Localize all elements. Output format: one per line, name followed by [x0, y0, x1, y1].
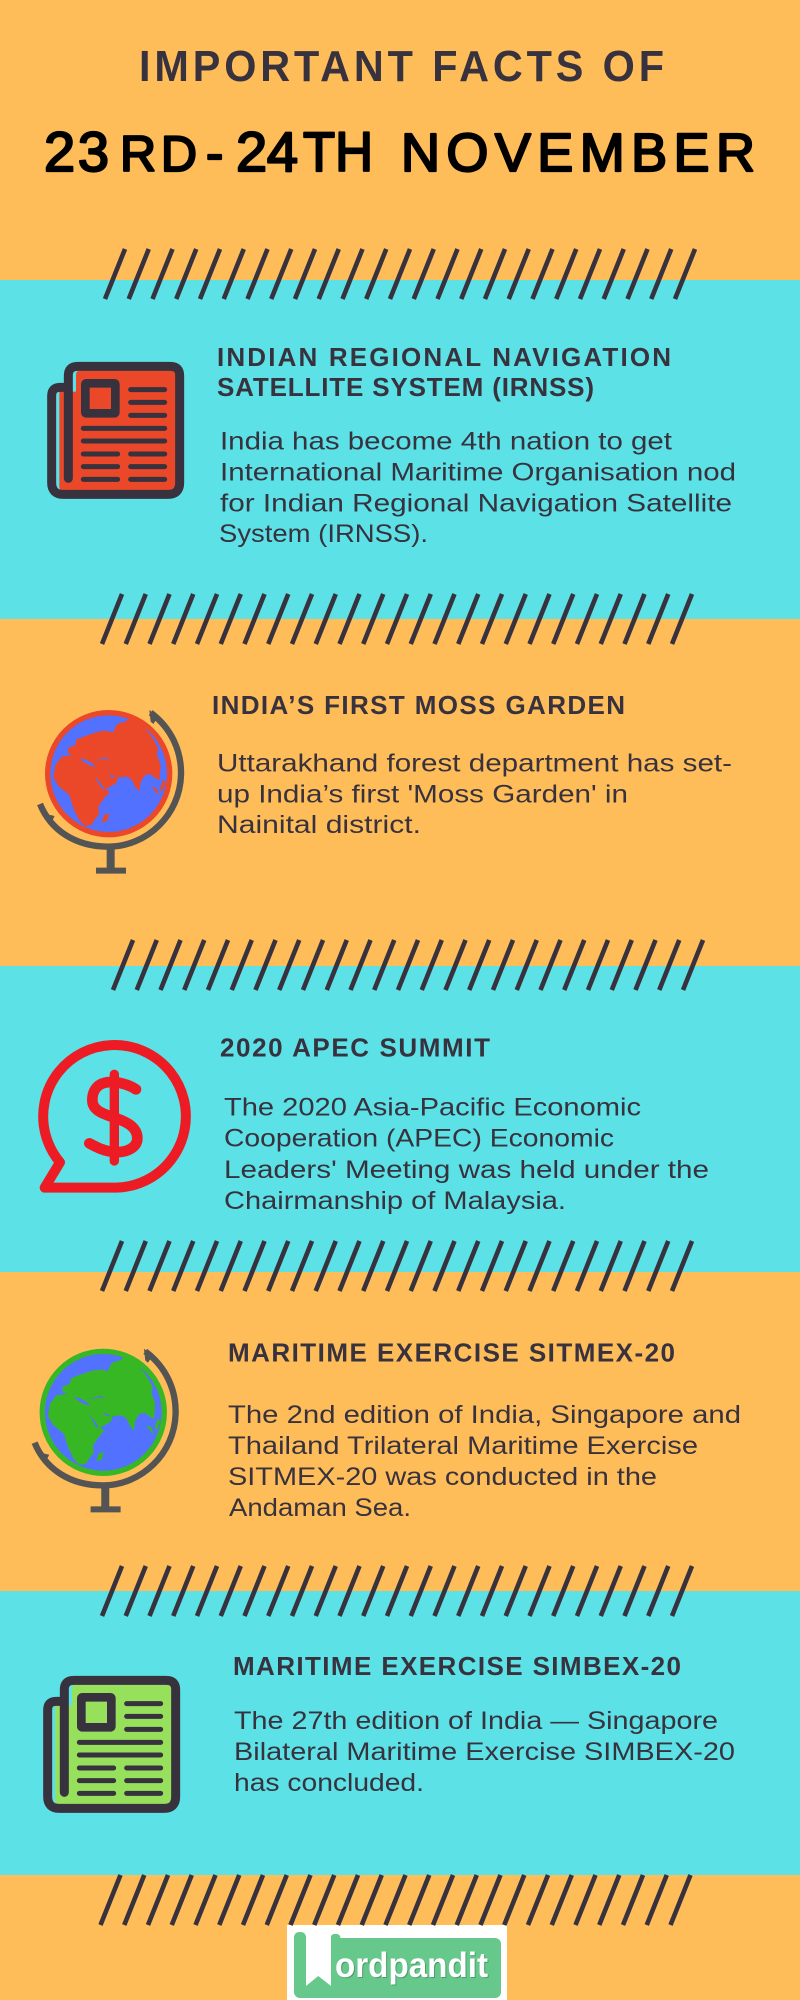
heading: MARITIME EXERCISE SITMEX-20 — [228, 1338, 675, 1368]
heading: INDIAN REGIONAL NAVIGATION — [217, 342, 671, 372]
panel: IRNSS — [0, 280, 800, 619]
title: date: 23 — [44, 120, 109, 183]
panel: SIMBEX-20 — [0, 1591, 800, 1875]
heading: SATELLITE SYSTEM (IRNSS) — [217, 372, 594, 402]
icon: green newspaper — [48, 1680, 176, 1808]
text block — [217, 750, 732, 839]
text block: Cooperation (APEC) Economic — [224, 1124, 614, 1152]
text block — [234, 1707, 735, 1797]
title: date: TH — [303, 120, 373, 183]
heading: INDIA’S FIRST MOSS GARDEN — [212, 690, 625, 720]
text block: The 2020 Asia-Pacific Economic — [224, 1094, 641, 1122]
text block: The 27th edition of India — Singapore — [234, 1707, 718, 1735]
text block: Uttarakhand forest department has set- — [217, 750, 732, 778]
text block: SITMEX-20 was conducted in the — [228, 1463, 657, 1491]
text block — [219, 428, 736, 548]
panel: SITMEX-20 — [0, 1272, 800, 1591]
panel: footer — [0, 1875, 800, 2000]
text block: up India’s first 'Moss Garden' in — [217, 780, 628, 808]
text block: Nainital district. — [217, 811, 421, 839]
text block: System (IRNSS). — [219, 520, 428, 548]
text block — [224, 1094, 709, 1215]
text block: India has become 4th nation to get — [220, 428, 672, 456]
text block — [228, 1401, 741, 1522]
text block: Thailand Trilateral Maritime Exercise — [228, 1432, 698, 1460]
title: date: 24 — [236, 120, 298, 183]
heading: 2020 APEC SUMMIT — [220, 1032, 490, 1062]
text block: for Indian Regional Navigation Satellite — [220, 490, 732, 518]
text block: Bilateral Maritime Exercise SIMBEX-20 — [234, 1738, 735, 1766]
icon: red globe — [40, 710, 181, 874]
heading: MARITIME EXERCISE SIMBEX-20 — [233, 1651, 681, 1681]
panel: moss garden — [0, 619, 800, 966]
panel: title header — [0, 0, 800, 280]
text block: Chairmanship of Malaysia. — [224, 1187, 566, 1215]
logo: wordpandit: ordpandit — [335, 1946, 488, 1985]
title: important facts of: IMPORTANT FACTS OF — [139, 42, 664, 91]
heading — [217, 342, 671, 402]
text block: Andaman Sea. — [229, 1494, 411, 1522]
text block: International Maritime Organisation nod — [220, 458, 736, 486]
text block: Leaders' Meeting was held under the — [224, 1156, 709, 1184]
logo: wordpandit — [287, 1925, 507, 2000]
title: date: NOVEMBER — [401, 123, 755, 183]
icon: green globe — [35, 1349, 176, 1512]
text block: The 2nd edition of India, Singapore and — [228, 1401, 741, 1429]
panel: APEC summit — [0, 966, 800, 1272]
text block: has concluded. — [234, 1769, 424, 1797]
icon: dollar speech bubble — [43, 1045, 186, 1188]
title: date: - — [206, 125, 223, 183]
title: date: RD — [120, 126, 197, 182]
icon: red newspaper — [52, 366, 180, 494]
